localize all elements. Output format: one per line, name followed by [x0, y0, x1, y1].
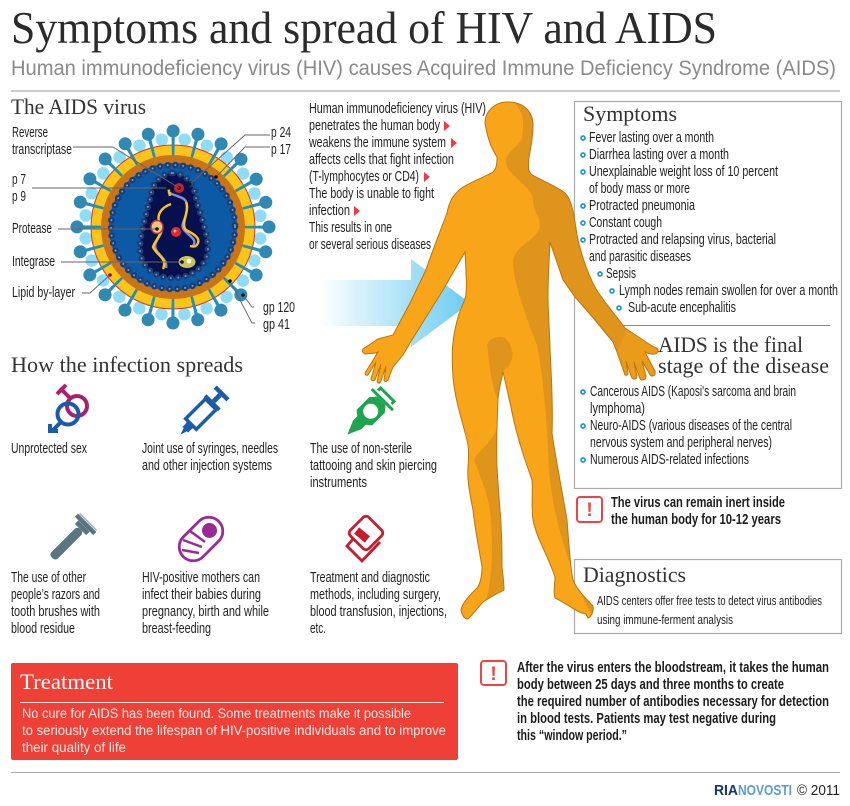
virus labels and leader lines: Protease	[12, 221, 52, 237]
spread labels: pregnancy, birth and while	[142, 604, 269, 620]
symptom list: and parasitic diseases	[589, 249, 691, 265]
symptom list: Sub-acute encephalitis	[628, 300, 736, 316]
panel: how HIV acts on the body: infection	[309, 203, 350, 219]
spread labels: HIV-positive mothers can	[142, 570, 260, 586]
spread labels: Unprotected sex	[11, 441, 88, 457]
panel: how HIV acts on the body: penetrates the human body	[309, 118, 441, 134]
heading: symptoms: Symptoms	[583, 101, 677, 126]
spread labels: tooth brushes with	[11, 604, 100, 620]
callout: window period: in blood tests. Patients may test negative during	[517, 711, 776, 727]
callout: window period	[481, 660, 829, 744]
spread labels: instruments	[310, 475, 367, 491]
symptom list: Sepsis	[606, 266, 636, 282]
panel: how HIV acts on the body: (T-lymphocytes or CD4)	[309, 169, 419, 185]
icon: gender symbols	[50, 385, 87, 431]
spread labels: breast-feeding	[142, 621, 211, 637]
panel: diagnostics: using immune-ferment analysis	[597, 612, 733, 627]
virus labels and leader lines: Reverse	[12, 125, 48, 141]
spread labels: and other injection systems	[142, 458, 272, 474]
callout: virus inert: the human body for 10-12 years	[611, 512, 781, 528]
spread labels: people’s razors and	[11, 587, 100, 603]
panel: diagnostics	[574, 560, 842, 634]
panel: how HIV acts on the body: Human immunodeficiency virus (HIV)	[309, 101, 486, 117]
symptom list: Diarrhea lasting over a month	[589, 147, 729, 163]
heading: AIDS is the final stage: AIDS is the final	[658, 332, 803, 357]
panel: treatment: Treatment	[20, 669, 113, 694]
AIDS stage list: lymphoma)	[590, 401, 645, 417]
callout: virus inert: The virus can remain inert inside	[611, 495, 785, 511]
callout: window period: this “window period.”	[517, 728, 627, 744]
panel: treatment: No cure for AIDS has been found. Some treatments make it possible	[22, 706, 411, 721]
spread labels: infect their babies during	[142, 587, 261, 603]
title: Symptoms and spread of HIV and AIDS	[11, 2, 717, 53]
panel: treatment: to seriously extend the lifespan of HIV-positive individuals and to improve	[22, 723, 446, 738]
logo and copyright: RIA	[714, 782, 738, 799]
callout: window period: !	[490, 664, 497, 685]
virus labels and leader lines: transcriptase	[12, 142, 72, 158]
subtitle: Human immunodeficiency virus (HIV) causes Acquired Immune Deficiency Syndrome (AIDS)	[11, 57, 836, 80]
virus labels and leader lines: p 24	[271, 125, 291, 141]
panel: how HIV acts on the body: This results in one	[309, 220, 392, 236]
icon: syringe	[173, 385, 230, 442]
symptom list: Protracted and relapsing virus, bacterial	[589, 232, 776, 248]
logo and copyright	[714, 782, 840, 799]
virus diagram	[77, 131, 269, 323]
panel: how HIV acts on the body: affects cells that fight infection	[309, 152, 454, 168]
human body figure	[362, 102, 659, 620]
virus labels and leader lines: Integrase	[12, 254, 55, 270]
icon: razor	[43, 512, 98, 567]
virus labels and leader lines: Lipid by-layer	[12, 285, 75, 301]
panel: how the infection spreads	[11, 352, 447, 637]
panel: diagnostics: Diagnostics	[583, 562, 686, 587]
spread labels: Joint use of syringes, needles	[142, 441, 278, 457]
icon: tattoo machine	[337, 383, 399, 445]
logo and copyright: NOVOSTI	[738, 782, 792, 799]
spread labels: Treatment and diagnostic	[310, 570, 430, 586]
AIDS stage list	[581, 384, 796, 468]
spread labels: The use of non-sterile	[310, 441, 412, 457]
heading: AIDS is the final stage: stage of the disease	[658, 353, 829, 378]
heading: how the infection spreads: How the infection spreads	[11, 352, 243, 377]
icon: blood bag	[347, 515, 384, 561]
virus labels and leader lines: p 7	[12, 172, 26, 188]
symptom list: Fever lasting over a month	[589, 130, 714, 146]
panel: the AIDS virus	[11, 94, 295, 333]
virus labels and leader lines: gp 120	[263, 300, 295, 316]
spread labels	[11, 441, 447, 637]
callout: virus inert: !	[586, 500, 593, 521]
panel: treatment: their quality of life	[22, 740, 126, 755]
virus labels and leader lines: p 9	[12, 189, 26, 205]
panel: how HIV acts on the body	[308, 101, 486, 253]
spread labels: The use of other	[11, 570, 86, 586]
AIDS stage list: nervous system and peripheral nerves)	[590, 435, 772, 451]
logo and copyright: © 2011	[797, 783, 840, 799]
panel: how HIV acts on the body: or several serious diseases	[309, 237, 431, 253]
symptom list	[581, 130, 838, 316]
virus labels and leader lines: p 17	[271, 142, 291, 158]
virus labels and leader lines	[12, 125, 295, 333]
heading: the AIDS virus: The AIDS virus	[11, 94, 146, 119]
symptom list: Unexplainable weight loss of 10 percent	[589, 164, 778, 180]
symptom list: Constant cough	[589, 215, 662, 231]
panel: symptoms	[574, 101, 842, 488]
spread labels: blood residue	[11, 621, 75, 637]
spread labels: methods, including surgery,	[310, 587, 441, 603]
icon: swaddled baby	[173, 511, 229, 567]
spread labels: tattooing and skin piercing	[310, 458, 437, 474]
heading: AIDS is the final stage	[658, 332, 829, 378]
spread labels: blood transfusion, injections,	[310, 604, 447, 620]
panel: treatment	[11, 663, 458, 760]
virus labels and leader lines: gp 41	[263, 317, 290, 333]
panel: how HIV acts on the body: weakens the immune system	[308, 135, 446, 151]
arrow: virus entering body	[320, 259, 470, 347]
spread labels: etc.	[310, 621, 326, 637]
symptom list: of body mass or more	[589, 181, 690, 197]
symptom list: Protracted pneumonia	[589, 198, 696, 214]
callout: virus inert	[577, 495, 785, 528]
AIDS stage list: Numerous AIDS-related infections	[590, 452, 749, 468]
panel: how HIV acts on the body: The body is unable to fight	[309, 186, 434, 202]
